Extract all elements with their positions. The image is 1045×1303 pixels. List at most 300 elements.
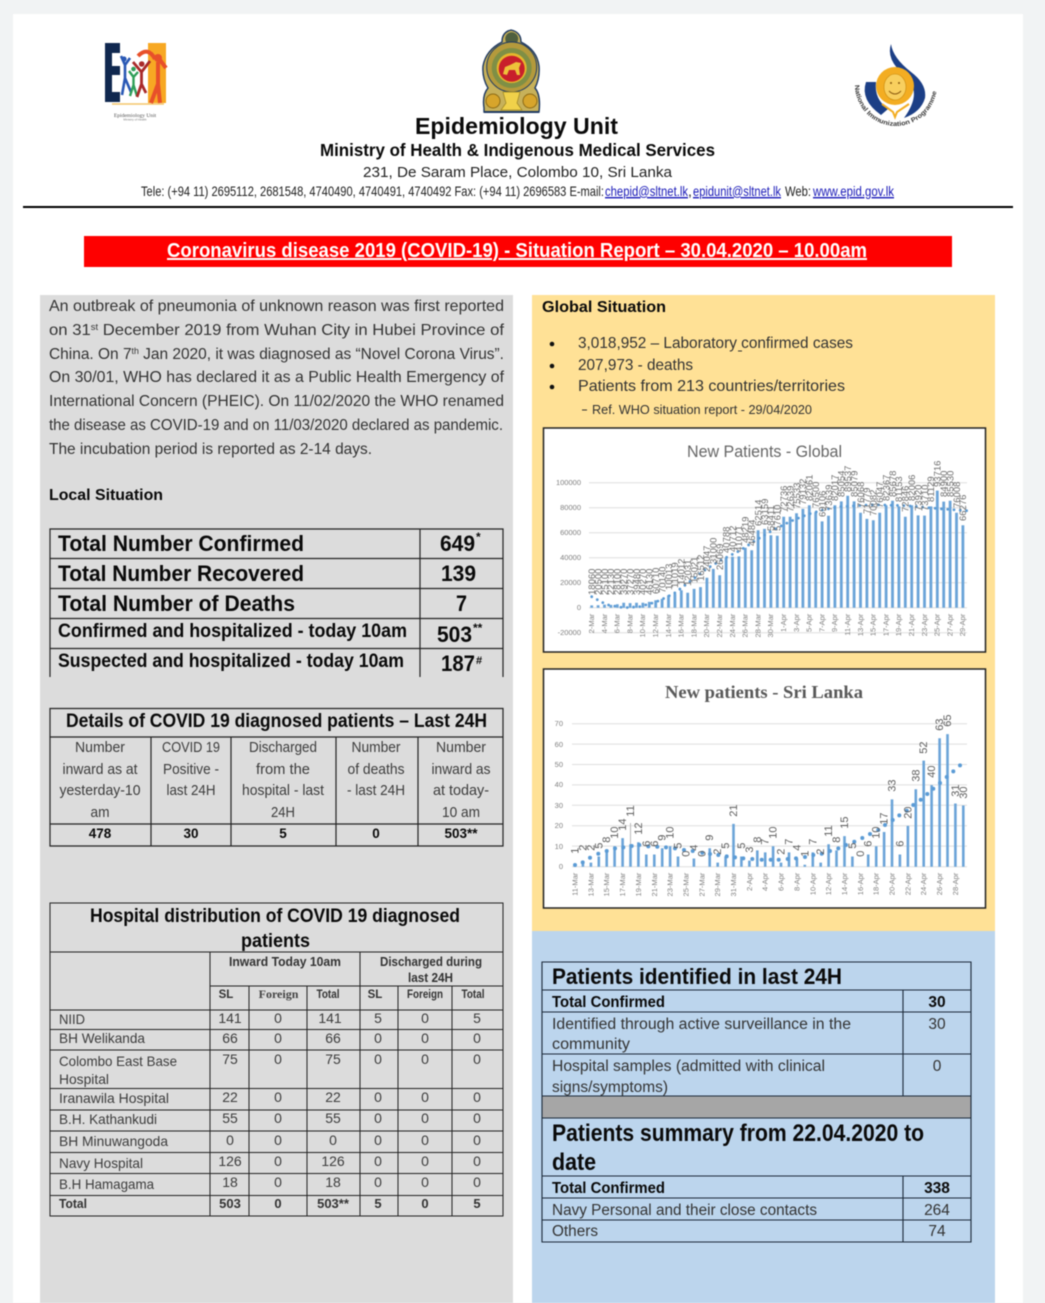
- table: patients summary to date: Total Confirmed: [552, 1180, 665, 1197]
- chart: new patients Sri Lanka: [544, 669, 986, 908]
- table: hospital distribution: 0: [274, 1051, 282, 1067]
- header: [104, 28, 937, 200]
- chart: new patients Sri Lanka: 5: [847, 843, 859, 849]
- chart: new patients Sri Lanka: 12-Apr: [824, 872, 833, 895]
- chart: new patients global: 9-Apr: [830, 613, 839, 632]
- table: local totals: *: [476, 530, 481, 544]
- chart: new patients Sri Lanka: 10: [871, 826, 883, 839]
- chart: new patients global: 18-Mar: [689, 613, 698, 637]
- chart: new patients global: 5-Apr: [805, 613, 814, 632]
- chart: new patients global: 76047: [875, 482, 886, 508]
- chart: new patients Sri Lanka: 5: [720, 843, 732, 849]
- table: hospital distribution: 18: [222, 1174, 238, 1190]
- table: hospital distribution: Foreign: [407, 989, 443, 1001]
- chart: new patients Sri Lanka: 70: [555, 719, 563, 728]
- chart: new patients Sri Lanka: 6-Apr: [776, 872, 786, 891]
- chart: new patients Sri Lanka: 16-Apr: [856, 872, 865, 895]
- table: hospital distribution: 503: [219, 1196, 241, 1211]
- table: hospital distribution: 126: [218, 1153, 242, 1169]
- chart: new patients Sri Lanka: 63: [934, 718, 946, 731]
- chart: new patients global: 40000: [560, 553, 581, 562]
- chart: new patients global: 17-Apr: [881, 613, 890, 636]
- chart: new patients Sri Lanka: 25-Mar: [682, 872, 690, 896]
- chart: new patients Sri Lanka: 0: [680, 851, 692, 857]
- table: patients identified in last 24H: signs/symptoms): [552, 1079, 668, 1096]
- table: hospital distribution: 0: [473, 1153, 481, 1169]
- table: hospital distribution: last 24H: [408, 971, 453, 985]
- chart: new patients global: 28100: [613, 569, 624, 595]
- chart: new patients Sri Lanka: 15-Mar: [602, 872, 611, 896]
- chart: new patients Sri Lanka: 28-Apr: [951, 872, 960, 895]
- icon: National Immunization Programme logo: [854, 44, 937, 127]
- chart: new patients global: 82006: [907, 475, 918, 501]
- address: 231, De Saram Place, Colombo 10, Sri Lanka: [363, 164, 673, 181]
- table: hospital distribution: 0: [374, 1089, 382, 1105]
- chart: new patients Sri Lanka: 7: [784, 839, 796, 845]
- chart: new patients Sri Lanka: 2: [577, 845, 589, 851]
- table: hospital distribution: 66: [222, 1030, 238, 1046]
- chart: new patients Sri Lanka: 2: [585, 845, 597, 851]
- table: hospital distribution: 0: [421, 1110, 429, 1126]
- chart: new patients global: 73710: [920, 485, 931, 511]
- chart: new patients Sri Lanka: 30: [958, 786, 970, 799]
- chart: new patients global: 29-Apr: [958, 613, 967, 636]
- table: patients summary to date: Navy Personal and their close contacts: [552, 1202, 817, 1219]
- chart: new patients Sri Lanka: 50: [555, 760, 563, 769]
- chart: new patients Sri Lanka: 0: [696, 851, 708, 857]
- table: hospital distribution: B.H. Kathankudi: [59, 1111, 157, 1127]
- table: hospital distribution: SL: [219, 989, 233, 1001]
- chart: new patients Sri Lanka: 1: [799, 851, 811, 857]
- table: patients identified in last 24H: 30: [928, 1016, 946, 1033]
- text block: outbreak background: the disease as COVID-19 and on 11/03/2020 declared as pandemic.: [49, 417, 503, 434]
- chart: new patients global: 39270: [619, 569, 630, 595]
- chart: new patients Sri Lanka: 11: [625, 805, 637, 817]
- chart: new patients Sri Lanka: 6: [649, 841, 661, 847]
- table: patients identified in last 24H: 0: [933, 1058, 942, 1075]
- table: details of last 24H: [50, 708, 503, 846]
- chart: new patients global: 12-Mar: [651, 613, 660, 637]
- chart: new patients global: 70082: [869, 490, 880, 516]
- table: patients summary to date: 264: [924, 1202, 950, 1219]
- table: details of last 24H: am: [90, 804, 110, 821]
- chart: new patients Sri Lanka: 8: [752, 837, 764, 843]
- chart: new patients global: 70140: [657, 567, 668, 593]
- chart: new patients Sri Lanka: 20: [555, 821, 563, 830]
- table: hospital distribution: 0: [329, 1132, 337, 1148]
- list: global figures: Patients from 213 countries/territories: [578, 378, 845, 395]
- table: local totals: 139: [441, 561, 476, 586]
- table: hospital distribution: 0: [473, 1089, 481, 1105]
- text block: outbreak background: [49, 298, 505, 458]
- panel: patients identified: [532, 931, 995, 1303]
- chart: new patients Sri Lanka: 17: [879, 812, 891, 825]
- chart: new patients Sri Lanka: 4-Apr: [761, 872, 770, 891]
- text block: outbreak background: th: [132, 346, 139, 356]
- table: hospital distribution: Total: [59, 1196, 87, 1211]
- chart: new patients Sri Lanka: 24-Apr: [919, 872, 928, 895]
- ministry name: Ministry of Health & Indigenous Medical Services: [320, 140, 715, 160]
- icon: Epidemiology Unit logo: Epidemiology Unit: [114, 113, 157, 119]
- table: patients summary to date: date: [552, 1149, 596, 1176]
- chart: new patients global: 84900: [939, 471, 950, 497]
- chart: new patients Sri Lanka: 40: [555, 780, 563, 789]
- table: hospital distribution: Navy Hospital: [59, 1155, 143, 1171]
- table: hospital distribution: 141: [318, 1010, 342, 1026]
- table: hospital distribution: 66: [325, 1030, 341, 1046]
- table: local totals: Confirmed and hospitalized - today 10am: [58, 621, 407, 642]
- chart: new patients global: 1-Apr: [779, 613, 788, 632]
- table: local totals: [50, 529, 503, 677]
- chart: new patients Sri Lanka: 11-Mar: [570, 872, 580, 896]
- chart: new patients Sri Lanka: 2: [776, 849, 788, 855]
- table: hospital distribution: 0: [421, 1010, 429, 1026]
- chart: new patients global: New Patients - Global: [687, 442, 842, 461]
- table: patients identified in last 24H: community: [552, 1036, 630, 1053]
- chart: new patients Sri Lanka: 10: [609, 826, 621, 839]
- chart: new patients Sri Lanka: 0: [559, 862, 563, 871]
- chart: new patients global: 39480: [632, 569, 643, 595]
- table: details of last 24H: Number: [75, 739, 125, 756]
- table: details of last 24H: Details of COVID 19 diagnosed patients – Last 24H: [66, 711, 487, 732]
- table: hospital distribution: 0: [274, 1174, 282, 1190]
- chart: new patients Sri Lanka: New patients - Sri Lanka: [665, 682, 863, 702]
- chart: new patients global: 18060: [587, 569, 598, 595]
- table: local totals: 7: [456, 591, 467, 616]
- heading: local situation: Local Situation: [49, 487, 163, 504]
- chart: new patients Sri Lanka: 20-Apr: [888, 872, 896, 895]
- chart: new patients Sri Lanka: 10-Apr: [808, 872, 817, 895]
- list: global figures: [550, 335, 853, 417]
- table: hospital distribution: 0: [374, 1051, 382, 1067]
- table: hospital distribution: Colombo East Base: [59, 1053, 177, 1069]
- chart: new patients global: 71779: [862, 488, 873, 514]
- table: details of last 24H: 0: [372, 826, 380, 841]
- chart: new patients global: 14-Mar: [664, 613, 673, 637]
- chart: new patients global: 41071: [734, 526, 745, 552]
- table: local totals: Suspected and hospitalized - today 10am: [58, 651, 404, 672]
- chart: new patients global: [544, 428, 986, 652]
- chart: new patients global: 11019: [670, 562, 681, 588]
- chart: new patients Sri Lanka: 7: [760, 839, 772, 845]
- chart: new patients global: 14012: [677, 559, 688, 585]
- chart: new patients Sri Lanka: 60: [555, 740, 563, 749]
- chart: new patients Sri Lanka: 5: [672, 843, 684, 849]
- table: hospital distribution: patients: [241, 931, 310, 952]
- list: global figures: 207,973 - deaths: [578, 357, 693, 374]
- chart: new patients Sri Lanka: 6: [641, 841, 653, 847]
- chart: new patients global: 72639: [785, 486, 796, 512]
- heading: global situation: Global Situation: [542, 299, 666, 316]
- table: patients identified in last 24H: Identified through active surveillance in the: [552, 1016, 851, 1033]
- contact line: Web:: [785, 183, 811, 199]
- title banner: Coronavirus disease 2019 (COVID-19) - Situation Report – 30.04.2020 – 10.00am: [167, 240, 867, 262]
- contact line: epidunit@sltnet.lk: [693, 183, 782, 199]
- table: hospital distribution: 0: [274, 1153, 282, 1169]
- table: details of last 24H: inward as: [432, 761, 490, 778]
- table: patients identified in last 24H: Hospital samples (admitted with clinical: [552, 1058, 825, 1075]
- contact line: www.epid.gov.lk: [812, 183, 895, 199]
- table: details of last 24H: inward as at: [62, 761, 138, 778]
- table: hospital distribution: Inward Today 10am: [229, 955, 341, 969]
- chart: new patients global: 28-Mar: [753, 613, 762, 637]
- chart: new patients global: 25-Apr: [933, 613, 942, 636]
- table: details of last 24H: 478: [89, 826, 112, 841]
- table: hospital distribution: 0: [374, 1030, 382, 1046]
- chart: new patients Sri Lanka: 3: [744, 847, 756, 853]
- table: details of last 24H: Positive -: [163, 761, 219, 778]
- table: local totals: 649: [440, 531, 475, 556]
- table: details of last 24H: - last 24H: [347, 782, 405, 799]
- contact line: chepid@sltnet.lk: [605, 183, 689, 199]
- table: hospital distribution: 0: [421, 1196, 429, 1211]
- table: hospital distribution: 0: [374, 1174, 382, 1190]
- icon: Epidemiology Unit logo: Ministry of Health: [123, 118, 147, 122]
- chart: new patients Sri Lanka: 18-Apr: [872, 872, 881, 895]
- chart: new patients Sri Lanka: 1: [570, 848, 582, 854]
- chart: new patients global: 16512: [696, 555, 707, 581]
- chart: new patients Sri Lanka: 40: [926, 765, 938, 778]
- table: hospital distribution: NIID: [59, 1011, 85, 1027]
- table: local totals: **: [473, 621, 483, 635]
- table: details of last 24H: 5: [279, 826, 287, 841]
- text block: outbreak background: On 30/01, WHO has declared it as a Public Health Emergency of: [49, 369, 505, 386]
- chart: new patients global: 72846: [901, 486, 912, 512]
- table: hospital distribution: 55: [325, 1110, 341, 1126]
- chart: new patients global: 60710: [651, 568, 662, 594]
- table: hospital distribution: 0: [274, 1110, 282, 1126]
- table: details of last 24H: 10 am: [442, 804, 480, 821]
- table: hospital distribution: Discharged during: [380, 955, 482, 969]
- chart: new patients Sri Lanka: 12: [633, 822, 645, 835]
- table: local totals: Total Number Confirmed: [58, 531, 304, 556]
- chart: new patients global: 93716: [933, 461, 944, 487]
- chart: new patients global: 63159: [760, 499, 771, 525]
- chart: new patients global: 62514: [753, 500, 764, 526]
- chart: new patients global: 11-Apr: [843, 613, 852, 636]
- chart: new patients Sri Lanka: 0: [855, 851, 867, 857]
- table: patients summary to date: 74: [928, 1223, 946, 1240]
- chart: new patients Sri Lanka: 33: [886, 779, 898, 792]
- chart: new patients Sri Lanka: 31: [950, 784, 962, 797]
- chart: new patients global: 40788: [721, 527, 732, 553]
- chart: new patients global: 85530: [945, 471, 956, 497]
- chart: new patients global: 40712: [728, 526, 739, 552]
- table: hospital distribution: 75: [222, 1051, 238, 1067]
- table: details of last 24H: Number: [436, 739, 486, 756]
- text block: outbreak background: An outbreak of pneumonia of unknown reason was first reported: [49, 298, 504, 315]
- table: hospital distribution: B.H Hamagama: [59, 1176, 154, 1192]
- chart: new patients global: 31000: [709, 538, 720, 564]
- contact line: ,: [688, 183, 692, 199]
- chart: new patients global: 21-Apr: [907, 613, 916, 636]
- chart: new patients Sri Lanka: 6: [894, 841, 906, 847]
- chart: new patients global: 80000: [560, 503, 581, 512]
- chart: new patients global: 3-Apr: [792, 613, 801, 632]
- chart: new patients global: 12031: [683, 560, 694, 586]
- chart: new patients Sri Lanka: 8-Apr: [792, 872, 801, 891]
- chart: new patients global: 19-Apr: [894, 613, 903, 636]
- chart: new patients Sri Lanka: 2: [712, 849, 724, 855]
- chart: new patients Sri Lanka: 10: [665, 826, 677, 839]
- table: details of last 24H: last 24H: [166, 782, 216, 799]
- chart: new patients global: 16-Mar: [677, 613, 686, 637]
- chart: new patients global: 2-Mar: [587, 613, 596, 633]
- chart: new patients global: 30-Mar: [766, 613, 775, 637]
- chart: new patients Sri Lanka: 31-Mar: [729, 872, 738, 896]
- chart: new patients global: 10013: [664, 564, 675, 590]
- chart: new patients Sri Lanka: 38: [910, 769, 922, 782]
- chart: new patients global: 24047: [702, 546, 713, 572]
- chart: new patients Sri Lanka: 5: [736, 843, 748, 849]
- chart: new patients Sri Lanka: 9: [657, 835, 669, 841]
- table: hospital distribution: Total: [462, 989, 484, 1001]
- table: hospital distribution: 0: [226, 1132, 234, 1148]
- chart: new patients Sri Lanka: 20: [902, 806, 914, 819]
- chart: new patients Sri Lanka: 17-Mar: [618, 872, 627, 896]
- chart: new patients global: 82367: [881, 475, 892, 501]
- chart: new patients global: 15021: [689, 557, 700, 583]
- text block: outbreak background: December 2019 from Wuhan City in Hubei Province of: [98, 322, 505, 339]
- chart: new patients Sri Lanka: 8: [831, 837, 843, 843]
- chart: new patients global: 66276: [958, 495, 969, 521]
- table: local totals: 187: [441, 651, 475, 676]
- table: hospital distribution: 0: [374, 1110, 382, 1126]
- table: details of last 24H: Number: [352, 739, 400, 756]
- chart: new patients Sri Lanka: 9: [704, 835, 716, 841]
- chart: new patients global: 82017: [830, 475, 841, 501]
- chart: new patients global: 60000: [560, 528, 581, 537]
- table: hospital distribution: 22: [325, 1089, 341, 1105]
- table: hospital distribution: Hospital distribution of COVID 19 diagnosed: [90, 906, 460, 927]
- organisation name: Epidemiology Unit: [415, 113, 618, 139]
- table: hospital distribution: 55: [222, 1110, 238, 1126]
- chart: new patients global: 100000: [556, 478, 581, 487]
- table: hospital distribution: 0: [274, 1010, 282, 1026]
- chart: new patients global: 0: [577, 603, 581, 612]
- chart: new patients global: 46130: [645, 569, 656, 595]
- table: hospital distribution: 0: [421, 1089, 429, 1105]
- table: patients summary to date: Patients summary from 22.04.2020 to: [552, 1120, 924, 1147]
- table: details of last 24H: from the: [256, 761, 310, 778]
- chart: new patients global: 81129: [926, 476, 937, 502]
- chart: new patients global: 37270: [625, 569, 636, 595]
- table: hospital distribution: 0: [473, 1174, 481, 1190]
- chart: new patients global: 13-Apr: [856, 613, 865, 636]
- chart: new patients global: 89537: [843, 466, 854, 492]
- chart: new patients Sri Lanka: 2: [815, 849, 827, 855]
- chart: new patients global: 69106: [817, 491, 828, 517]
- chart: new patients global: 73639: [824, 485, 835, 511]
- chart: new patients Sri Lanka: 7: [807, 839, 819, 845]
- chart: new patients global: 20-Mar: [702, 613, 711, 637]
- table: details of last 24H: at today-: [433, 782, 489, 799]
- chart: new patients global: 20500: [593, 569, 604, 595]
- chart: new patients global: 27-Apr: [945, 613, 954, 636]
- table: hospital distribution: 503**: [317, 1196, 350, 1211]
- chart: new patients Sri Lanka: 2-Apr: [745, 872, 754, 891]
- icon: Epidemiology Unit logo: [105, 43, 166, 122]
- chart: new patients global: 58411: [766, 505, 777, 531]
- table: local totals: 503: [437, 622, 472, 647]
- title banner: [84, 236, 952, 267]
- table: local totals: Total Number of Deaths: [58, 591, 295, 616]
- chart: new patients global: 85678: [888, 471, 899, 497]
- table: hospital distribution: 0: [473, 1051, 481, 1067]
- chart: new patients global: 22-Mar: [715, 613, 724, 637]
- chart: new patients Sri Lanka: 14: [617, 818, 629, 831]
- panel: local situation: [40, 295, 513, 1303]
- chart: new patients global: 20000: [560, 578, 581, 587]
- chart: new patients global: 76068: [856, 482, 867, 508]
- chart: new patients global: 7-Apr: [817, 613, 826, 632]
- chart: new patients global: 22130: [606, 569, 617, 595]
- table: patients summary to date: Others: [552, 1223, 598, 1240]
- chart: new patients global: 40270: [638, 569, 649, 595]
- table: hospital distribution: 0: [473, 1132, 481, 1148]
- chart: new patients global: 23-Apr: [920, 613, 929, 636]
- chart: new patients Sri Lanka: 4: [688, 845, 700, 851]
- chart: new patients global: 75533: [792, 483, 803, 509]
- table: hospital distribution: 0: [421, 1132, 429, 1148]
- chart: new patients Sri Lanka: 21: [728, 804, 740, 817]
- table: hospital distribution: 5: [374, 1196, 382, 1211]
- table: hospital distribution: 0: [374, 1132, 382, 1148]
- table: patients summary to date: 338: [924, 1180, 950, 1197]
- table: patients summary to date: [552, 1120, 950, 1240]
- list: global figures: Ref. WHO situation report - 29/04/2020: [592, 403, 812, 417]
- chart: new patients global: 72736: [779, 486, 790, 512]
- table: details of last 24H: COVID 19: [162, 739, 220, 756]
- chart: new patients Sri Lanka: 4: [791, 845, 803, 851]
- chart: new patients Sri Lanka: 22-Apr: [903, 872, 912, 895]
- chart: new patients global: 26-Mar: [741, 613, 750, 637]
- chart: new patients global: 48219: [741, 517, 752, 543]
- table: hospital distribution: Iranawila Hospital: [59, 1090, 169, 1106]
- text block: outbreak background: International Concern (PHEIC). On 11/02/2020 the WHO renamed: [49, 393, 504, 410]
- table: local totals: #: [476, 655, 482, 667]
- icon: National Immunization Programme logo: National Immunization Programme: [854, 84, 937, 127]
- chart: new patients Sri Lanka: 8: [601, 837, 613, 843]
- table: hospital distribution: 0: [274, 1132, 282, 1148]
- text block: outbreak background: st: [91, 322, 99, 332]
- chart: new patients global: 26069: [715, 544, 726, 570]
- panel: global situation: [532, 295, 995, 931]
- table: hospital distribution: 141: [218, 1010, 242, 1026]
- table: details of last 24H: 24H: [271, 804, 295, 821]
- chart: new patients Sri Lanka: 30: [555, 801, 563, 810]
- chart: new patients Sri Lanka: 26-Apr: [935, 872, 944, 895]
- table: patients identified in last 24H: [552, 964, 946, 1096]
- table: hospital distribution: 5: [374, 1010, 382, 1026]
- table: patients identified in last 24H: Patients identified in last 24H: [552, 964, 842, 989]
- table: hospital distribution: 0: [421, 1051, 429, 1067]
- chart: new patients global: 79132: [798, 479, 809, 505]
- chart: new patients global: 4-Mar: [600, 613, 609, 633]
- table: hospital distribution: 0: [274, 1089, 282, 1105]
- text block: outbreak background: on 31: [49, 322, 89, 339]
- chart: new patients global: 57610: [773, 505, 784, 531]
- chart: new patients Sri Lanka: 5: [593, 843, 605, 849]
- chart: new patients Sri Lanka: 11: [823, 825, 835, 837]
- chart: new patients global: 73920: [913, 485, 924, 511]
- chart: new patients global: 8-Mar: [625, 613, 634, 633]
- chart: new patients Sri Lanka: 23-Mar: [666, 872, 675, 896]
- table: hospital distribution: 75: [325, 1051, 341, 1067]
- table: hospital distribution: 0: [421, 1153, 429, 1169]
- table: hospital distribution: 22: [222, 1089, 238, 1105]
- table: hospital distribution: 0: [274, 1030, 282, 1046]
